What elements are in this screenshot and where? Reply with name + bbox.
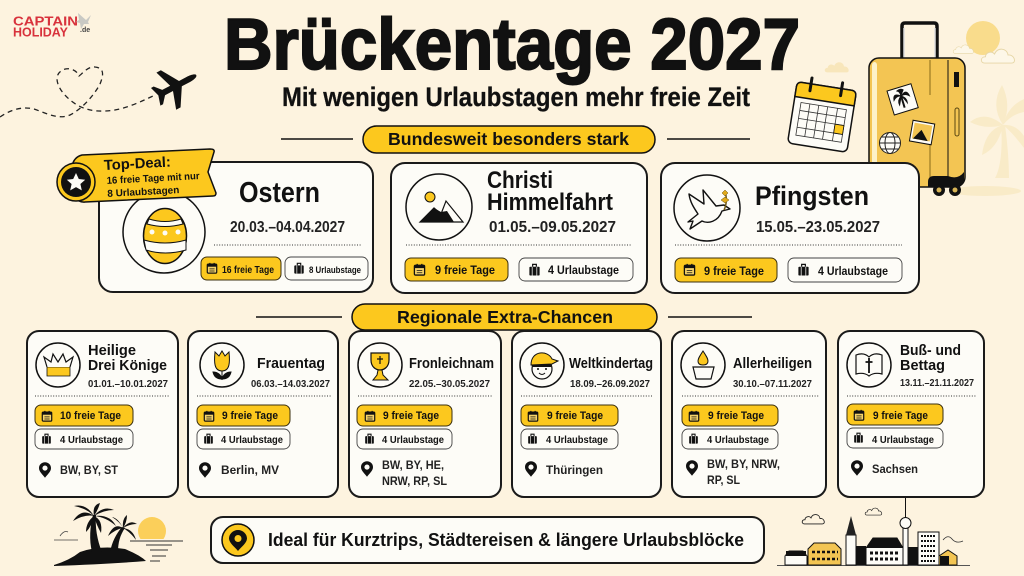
callout: Top-Deal ribbon: 16 freie Tage mit nur — [106, 171, 200, 187]
panel: Christi Himmelfahrt: 4 Urlaubstage — [548, 265, 619, 277]
panel: Allerheiligen — [672, 331, 826, 497]
panel: Weltkindertag: 18.09.–26.09.2027 — [570, 379, 650, 390]
icon: chalice — [358, 343, 402, 387]
panel: Allerheiligen: RP, SL — [707, 473, 740, 487]
section heading: Bundesweit besonders stark — [281, 126, 750, 153]
panel: Weltkindertag: Thüringen — [546, 463, 603, 477]
panel: Buß- und Bettag — [838, 331, 984, 497]
panel: Pfingsten: Pfingsten — [755, 181, 869, 211]
panel: Frauentag: Frauentag — [257, 355, 325, 372]
illustration: palm island with sun — [54, 503, 183, 566]
panel: Fronleichnam: NRW, RP, SL — [382, 474, 447, 488]
panel: Ostern: 16 freie Tage — [222, 264, 274, 276]
panel: Heilige Drei Könige — [27, 331, 178, 497]
panel: Christi Himmelfahrt: 01.05.–09.05.2027 — [489, 219, 616, 236]
panel: Ostern — [99, 162, 373, 292]
icon: suitcase — [869, 23, 965, 196]
panel: Frauentag: Berlin, MV — [221, 463, 279, 477]
section heading: Regionale Extra-Chancen: Regionale Extra-Chancen — [397, 307, 613, 327]
panel: Buß- und Bettag: Buß- und — [900, 342, 961, 359]
icon: airplane — [146, 57, 206, 115]
panel: Buß- und Bettag: 4 Urlaubstage — [872, 435, 934, 446]
panel: Frauentag — [188, 331, 338, 497]
decoration: sun and clouds — [825, 21, 1014, 72]
panel: Weltkindertag — [512, 331, 661, 497]
panel: Allerheiligen: 4 Urlaubstage — [707, 435, 769, 446]
illustration: city skyline — [777, 498, 970, 566]
icon: Easter egg — [123, 191, 205, 273]
panel: Fronleichnam: BW, BY, HE, — [382, 458, 444, 472]
section heading: Regionale Extra-Chancen — [256, 304, 752, 330]
icon: child with cap — [520, 343, 564, 387]
logo: Captain Holiday — [13, 13, 91, 40]
panel: Frauentag: 4 Urlaubstage — [221, 435, 283, 446]
panel: Heilige Drei Könige: 4 Urlaubstage — [60, 435, 123, 446]
logo: Captain Holiday: CAPTAIN — [13, 14, 78, 28]
callout: Top-Deal ribbon — [57, 149, 216, 202]
panel: Allerheiligen: Allerheiligen — [733, 356, 812, 372]
callout: ideal for — [211, 517, 764, 563]
panel: Fronleichnam: 22.05.–30.05.2027 — [409, 379, 490, 390]
panel: Ostern: 8 Urlaubstage — [309, 265, 361, 276]
panel: Heilige Drei Könige: 01.01.–10.01.2027 — [88, 379, 168, 390]
panel: Pfingsten: 15.05.–23.05.2027 — [756, 219, 880, 236]
panel: Ostern: Ostern — [239, 177, 320, 209]
panel: Fronleichnam — [349, 331, 501, 497]
panel: Fronleichnam: 9 freie Tage — [383, 410, 439, 422]
panel: Buß- und Bettag: Sachsen — [872, 462, 918, 476]
icon: crown — [36, 343, 80, 387]
panel: Weltkindertag: 9 freie Tage — [547, 410, 603, 422]
panel: Heilige Drei Könige: 10 freie Tage — [60, 410, 121, 422]
icon: mountains and sun — [406, 174, 472, 240]
panel: Buß- und Bettag: 9 freie Tage — [873, 410, 928, 422]
panel: Buß- und Bettag: Bettag — [900, 357, 945, 374]
callout: Top-Deal ribbon: 8 Urlaubstagen — [107, 185, 180, 200]
panel: Allerheiligen: 9 freie Tage — [708, 410, 764, 422]
panel: Christi Himmelfahrt: 9 freie Tage — [435, 265, 495, 277]
panel: Heilige Drei Könige: Drei Könige — [88, 357, 167, 374]
panel: Fronleichnam: 4 Urlaubstage — [382, 435, 444, 446]
icon: location pin — [222, 524, 254, 556]
panel: Heilige Drei Könige: Heilige — [88, 342, 136, 359]
panel: Pfingsten: 9 freie Tage — [704, 266, 764, 278]
panel: Frauentag: 9 freie Tage — [222, 410, 278, 422]
panel: Allerheiligen: 30.10.–07.11.2027 — [733, 379, 812, 390]
panel: Frauentag: 06.03.–14.03.2027 — [251, 379, 330, 390]
panel: Buß- und Bettag: 13.11.–21.11.2027 — [900, 378, 974, 389]
panel: Pfingsten: 4 Urlaubstage — [818, 266, 888, 278]
icon: wall calendar — [788, 76, 857, 152]
panel: Christi Himmelfahrt — [391, 163, 647, 293]
panel: Pfingsten — [661, 163, 919, 293]
logo: Captain Holiday: .de — [80, 27, 90, 34]
title: Brückentage 2027 — [224, 5, 800, 85]
icon: candle — [681, 343, 725, 387]
logo: Captain Holiday: HOLIDAY — [13, 26, 69, 40]
panel: Christi Himmelfahrt: Himmelfahrt — [487, 189, 613, 216]
panel: Weltkindertag: 4 Urlaubstage — [546, 435, 608, 446]
callout: ideal for: Ideal für Kurztrips, Städtereisen & längere Urlaubsblöcke — [268, 530, 744, 550]
decoration: palm tree — [949, 85, 1024, 196]
panel: Ostern: 20.03.–04.04.2027 — [230, 219, 345, 236]
icon: dove — [674, 175, 740, 241]
subtitle: Mit wenigen Urlaubstagen mehr freie Zeit — [282, 82, 750, 112]
panel: Fronleichnam: Fronleichnam — [409, 356, 494, 372]
section heading: Bundesweit besonders stark: Bundesweit besonders stark — [388, 129, 629, 149]
panel: Christi Himmelfahrt: Christi — [487, 167, 553, 194]
icon: book with cross — [847, 343, 891, 387]
icon: tulip — [200, 343, 244, 387]
callout: Top-Deal ribbon: Top-Deal: — [103, 155, 171, 174]
panel: Allerheiligen: BW, BY, NRW, — [707, 457, 780, 471]
dashed flight path with heart — [0, 67, 153, 117]
panel: Weltkindertag: Weltkindertag — [569, 356, 653, 372]
panel: Heilige Drei Könige: BW, BY, ST — [60, 463, 119, 477]
